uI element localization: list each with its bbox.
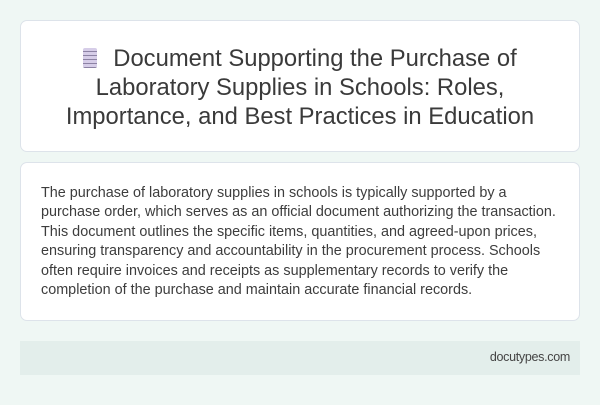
- title: [66, 45, 534, 130]
- text block: description: This document outlines the specific items, quantities, and agreed-upon prices,: [41, 224, 537, 240]
- text block: description: The purchase of laboratory supplies in schools is typically supported by a: [41, 185, 507, 201]
- footer text: source: docutypes.com: [490, 350, 570, 364]
- text block: description: purchase order, which serves as an official document authorizing the transaction.: [41, 204, 556, 220]
- panel: description card: [20, 162, 580, 321]
- title: Document Supporting the Purchase of: [113, 45, 517, 72]
- text block: description: completion of the purchase and maintain accurate financial records.: [41, 282, 472, 298]
- text block: description: often require invoices and receipts as supplementary records to verify the: [41, 263, 508, 279]
- icon: document scroll: [83, 48, 97, 68]
- panel: title card: [20, 20, 580, 152]
- text block: description: [41, 185, 556, 298]
- text block: description: ensuring transparency and accountability in the procurement process. Schools: [41, 243, 540, 259]
- footer bar: [20, 341, 580, 375]
- title: Importance, and Best Practices in Education: [66, 103, 534, 130]
- title: Laboratory Supplies in Schools: Roles,: [96, 74, 504, 101]
